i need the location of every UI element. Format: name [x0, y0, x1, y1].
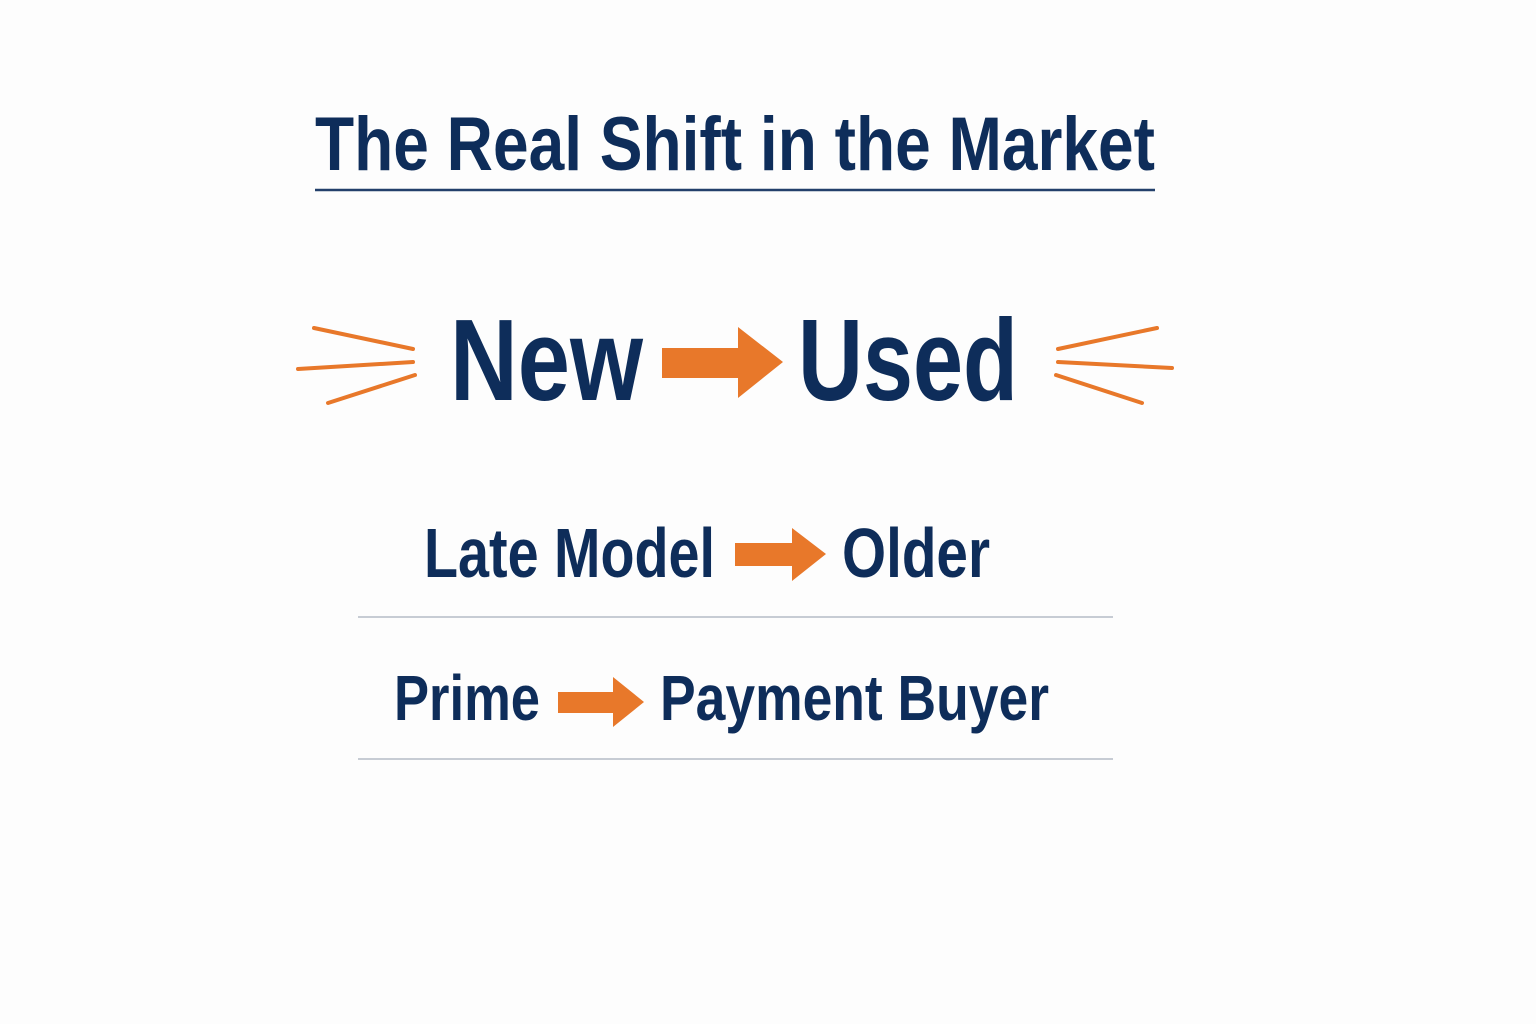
- right burst lines: [1056, 328, 1172, 403]
- arrow: late model to older: [735, 528, 826, 581]
- main shift: New to Used: [450, 295, 1018, 425]
- shift: Prime to Payment Buyer: Prime: [394, 662, 540, 734]
- shift: Late Model to Older: Late Model: [424, 514, 715, 592]
- title: The Real Shift in the Market: [315, 102, 1155, 187]
- arrow: prime to payment buyer: [558, 677, 644, 727]
- shift: Late Model to Older: Older: [842, 514, 990, 592]
- main shift: New to Used: Used: [798, 295, 1018, 425]
- shift: Prime to Payment Buyer: Payment Buyer: [660, 662, 1049, 734]
- arrow: new to used: [662, 327, 783, 398]
- shift: Prime to Payment Buyer: [394, 662, 1049, 734]
- shift: Late Model to Older: [424, 514, 990, 592]
- main shift: New to Used: New: [450, 295, 644, 425]
- left burst lines: [298, 328, 415, 403]
